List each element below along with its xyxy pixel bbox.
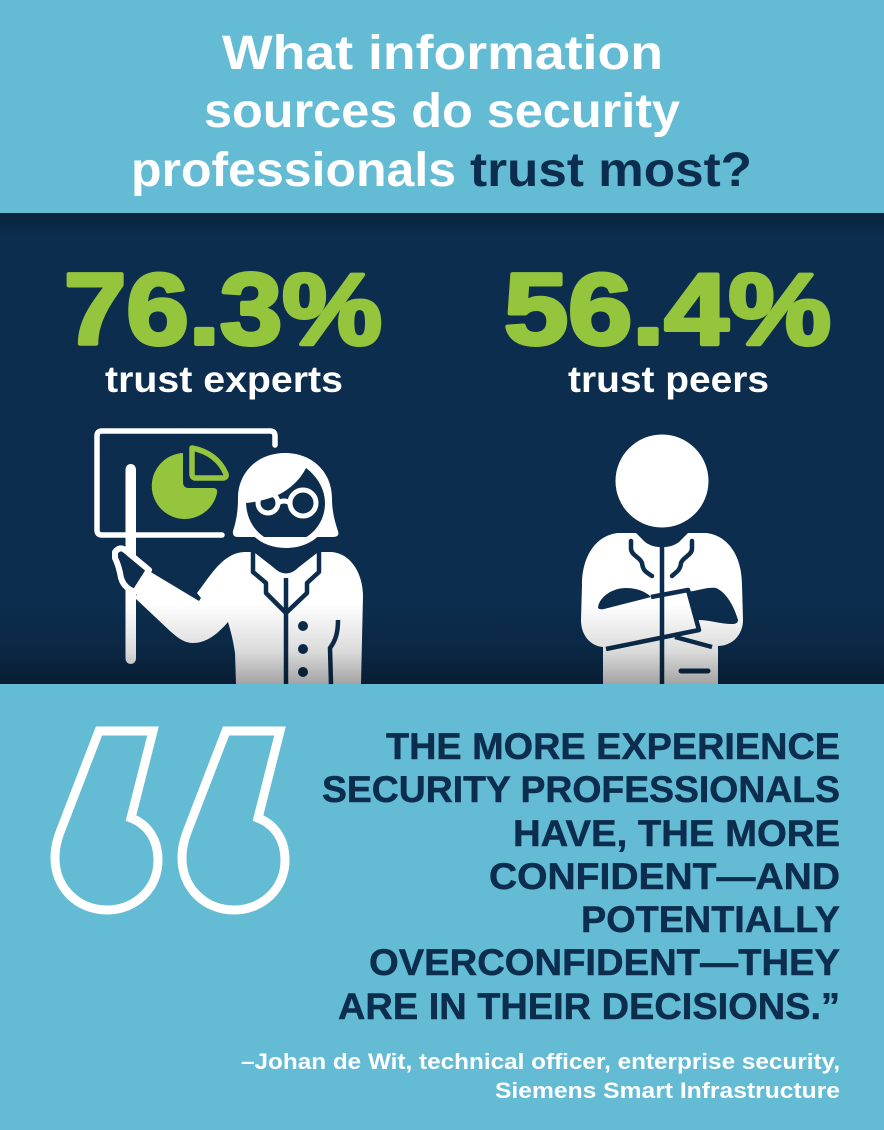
stat: trust peers [504, 254, 831, 400]
attribution: –Johan de Wit, technical officer, enterprise security, [241, 1049, 840, 1074]
hair and face [233, 453, 338, 548]
pointer [126, 464, 136, 664]
coat collar and seams [253, 552, 338, 684]
coat buttons [298, 621, 308, 677]
title: trust most? [470, 144, 752, 197]
quote text: THE MORE EXPERIENCE [386, 726, 840, 767]
panel: statistics [0, 213, 884, 684]
title: professionals [131, 144, 456, 197]
quote text: SECURITY PROFESSIONALS [322, 769, 840, 810]
stat: trust peers: 56.4% [504, 254, 831, 366]
title: What information [222, 27, 663, 80]
panel shading [0, 213, 884, 684]
icon: peer with crossed arms [581, 434, 743, 684]
attribution [241, 1049, 840, 1103]
presentation board [97, 431, 275, 535]
quote text: HAVE, THE MORE [513, 813, 840, 854]
head [616, 434, 708, 528]
jacket seams [631, 541, 712, 684]
title: sources do security [204, 85, 680, 138]
icon: expert presenting a pie chart [97, 431, 363, 684]
quote text: POTENTIALLY [581, 899, 840, 940]
title [131, 27, 752, 197]
stat: trust peers: trust peers [568, 359, 769, 400]
attribution: Siemens Smart Infrastructure [495, 1078, 840, 1103]
torso [581, 533, 743, 684]
stat: trust experts: 76.3% [64, 254, 382, 366]
quote text: CONFIDENT—AND [489, 856, 840, 897]
quote text [322, 726, 840, 1027]
icon: quotation mark [55, 731, 285, 910]
quote text: OVERCONFIDENT—THEY [369, 942, 840, 983]
neck [255, 550, 317, 574]
glasses [258, 490, 316, 516]
pie chart [152, 448, 226, 519]
crossed arms [598, 588, 738, 649]
stat: trust experts [64, 254, 382, 400]
hand [115, 548, 149, 592]
quote text: ARE IN THEIR DECISIONS.” [338, 986, 840, 1027]
stat: trust experts: trust experts [105, 359, 343, 400]
lab coat [135, 552, 363, 684]
